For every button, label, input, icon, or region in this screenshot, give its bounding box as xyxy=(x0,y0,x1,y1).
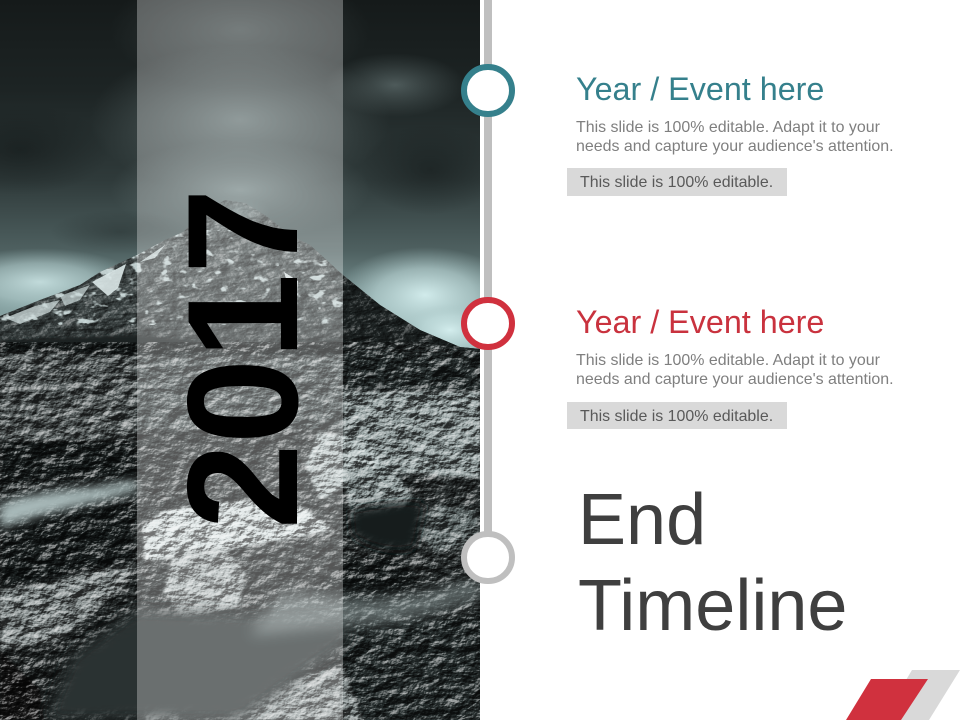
photo: mountain and rocky stream xyxy=(0,0,480,720)
decorative corner parallelograms xyxy=(846,670,960,720)
event 2 body text: This slide is 100% editable. Adapt it to your xyxy=(576,352,880,369)
event 1 tag xyxy=(567,168,787,196)
event 1 body text: needs and capture your audience's attention. xyxy=(576,138,894,155)
event 2 heading: Year / Event here xyxy=(576,304,824,340)
timeline marker: red xyxy=(461,296,515,350)
mountain xyxy=(0,200,480,350)
event 1 heading: Year / Event here xyxy=(576,71,824,107)
water xyxy=(0,480,480,720)
ground masses xyxy=(0,335,480,720)
event 2 body text: needs and capture your audience's attention. xyxy=(576,371,894,388)
sky xyxy=(0,0,515,360)
end timeline heading: End xyxy=(578,480,706,560)
event 2 tag: This slide is 100% editable. xyxy=(580,408,773,425)
event 2 tag xyxy=(567,402,787,429)
rocky ground xyxy=(0,335,480,720)
vertical year 2017: 2017 xyxy=(154,189,330,529)
event 1 body text xyxy=(576,119,894,155)
end timeline heading: Timeline xyxy=(578,566,847,646)
timeline marker: teal xyxy=(461,64,515,117)
translucent vertical band xyxy=(137,0,343,720)
timeline vertical line xyxy=(484,0,492,535)
end timeline heading xyxy=(578,480,847,646)
timeline marker: grey end xyxy=(461,530,515,584)
event 1 tag: This slide is 100% editable. xyxy=(580,174,773,191)
event 2 body text xyxy=(576,352,894,388)
event 1 body text: This slide is 100% editable. Adapt it to your xyxy=(576,119,880,136)
